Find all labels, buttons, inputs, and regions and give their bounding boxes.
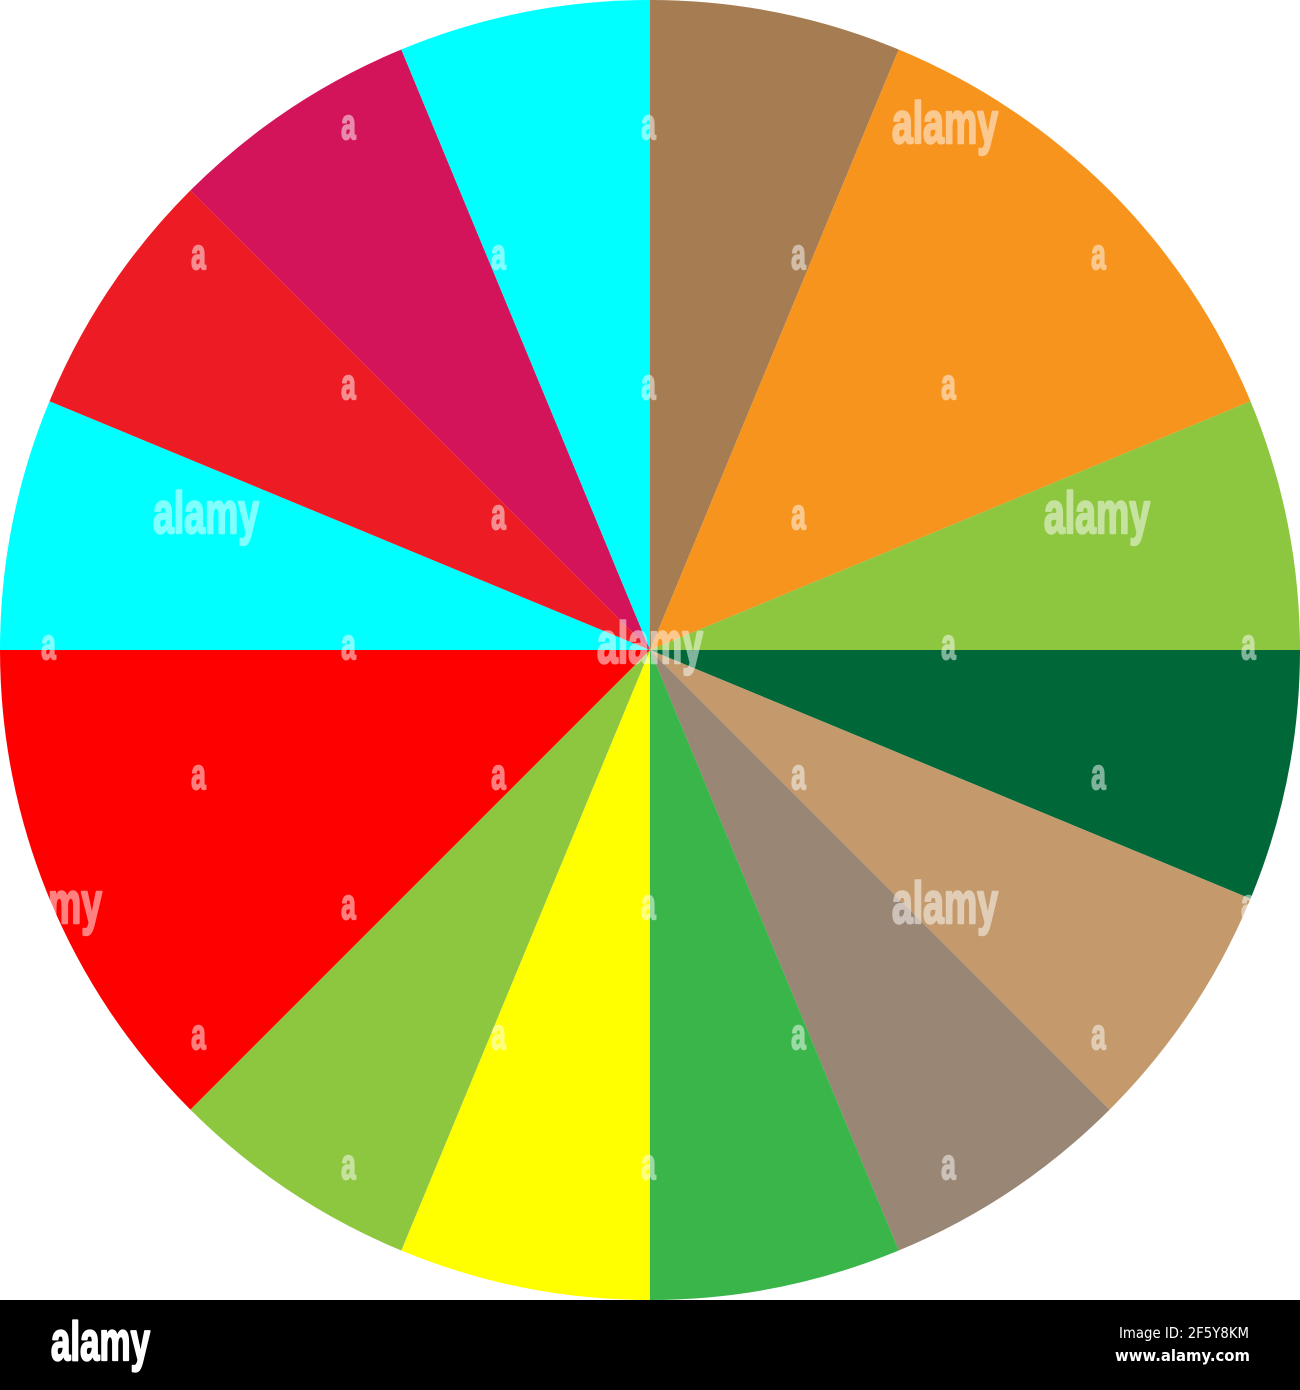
watermark small letters: a bbox=[791, 1009, 806, 1059]
watermark small letters: a bbox=[791, 229, 806, 279]
slice: red bbox=[50, 190, 650, 650]
watermark small letters: a bbox=[491, 1009, 506, 1059]
slice: green bbox=[650, 650, 899, 1300]
watermark small letters: a bbox=[941, 619, 956, 669]
watermark small letters: a bbox=[941, 1139, 956, 1189]
watermark small letters: a bbox=[941, 359, 956, 409]
watermark small letters: a bbox=[341, 99, 356, 149]
watermark small letters bbox=[41, 99, 1256, 1189]
slice: dark green bbox=[650, 650, 1300, 899]
slice: bright red bbox=[0, 650, 650, 1110]
watermark small letters: a bbox=[1091, 1009, 1106, 1059]
watermark small letters: a bbox=[491, 749, 506, 799]
slice: grey brown bbox=[650, 650, 1110, 1250]
watermark small letters: a bbox=[491, 489, 506, 539]
watermark wordmarks: alamy bbox=[1044, 481, 1150, 546]
slice: crimson bbox=[190, 50, 650, 650]
slice: orange bbox=[650, 50, 1250, 650]
watermark small letters: a bbox=[641, 1139, 656, 1189]
watermark small letters: a bbox=[641, 359, 656, 409]
watermark small letters: a bbox=[191, 1009, 206, 1059]
watermark wordmarks: alamy bbox=[153, 481, 259, 546]
watermark small letters: a bbox=[341, 879, 356, 929]
watermark wordmarks: alamy bbox=[892, 91, 998, 156]
watermark small letters: a bbox=[1091, 749, 1106, 799]
watermark small letters: a bbox=[191, 749, 206, 799]
image id: Image ID: 2F5Y8KM bbox=[1119, 1324, 1249, 1342]
slice: light green bbox=[650, 401, 1300, 650]
slice: yellow bbox=[401, 650, 650, 1300]
slice: tan bbox=[650, 650, 1250, 1110]
watermark small letters: a bbox=[491, 229, 506, 279]
watermark small letters: a bbox=[1241, 619, 1256, 669]
slice: cyan top bbox=[401, 0, 650, 650]
watermark small letters: a bbox=[1091, 229, 1106, 279]
slice: olive green bbox=[190, 650, 650, 1250]
watermark small letters: a bbox=[41, 619, 56, 669]
watermark wordmarks: alamy bbox=[0, 871, 102, 936]
watermark wordmarks: alamy bbox=[597, 611, 703, 676]
watermark wordmarks bbox=[0, 91, 1150, 936]
website: www.alamy.com bbox=[1115, 1346, 1250, 1365]
watermark small letters: a bbox=[1241, 879, 1256, 929]
watermark small letters: a bbox=[341, 1139, 356, 1189]
footer logo: alamy bbox=[51, 1310, 150, 1372]
watermark small letters: a bbox=[791, 489, 806, 539]
slice: cyan left bbox=[0, 401, 650, 650]
watermark wordmarks: alamy bbox=[892, 871, 998, 936]
slice: brown bbox=[650, 0, 899, 650]
watermark small letters: a bbox=[341, 619, 356, 669]
watermark small letters: a bbox=[791, 749, 806, 799]
watermark small letters: a bbox=[341, 359, 356, 409]
watermark small letters: a bbox=[641, 879, 656, 929]
footer bar bbox=[0, 1300, 1300, 1390]
watermark small letters: a bbox=[641, 99, 656, 149]
watermark small letters: a bbox=[191, 229, 206, 279]
